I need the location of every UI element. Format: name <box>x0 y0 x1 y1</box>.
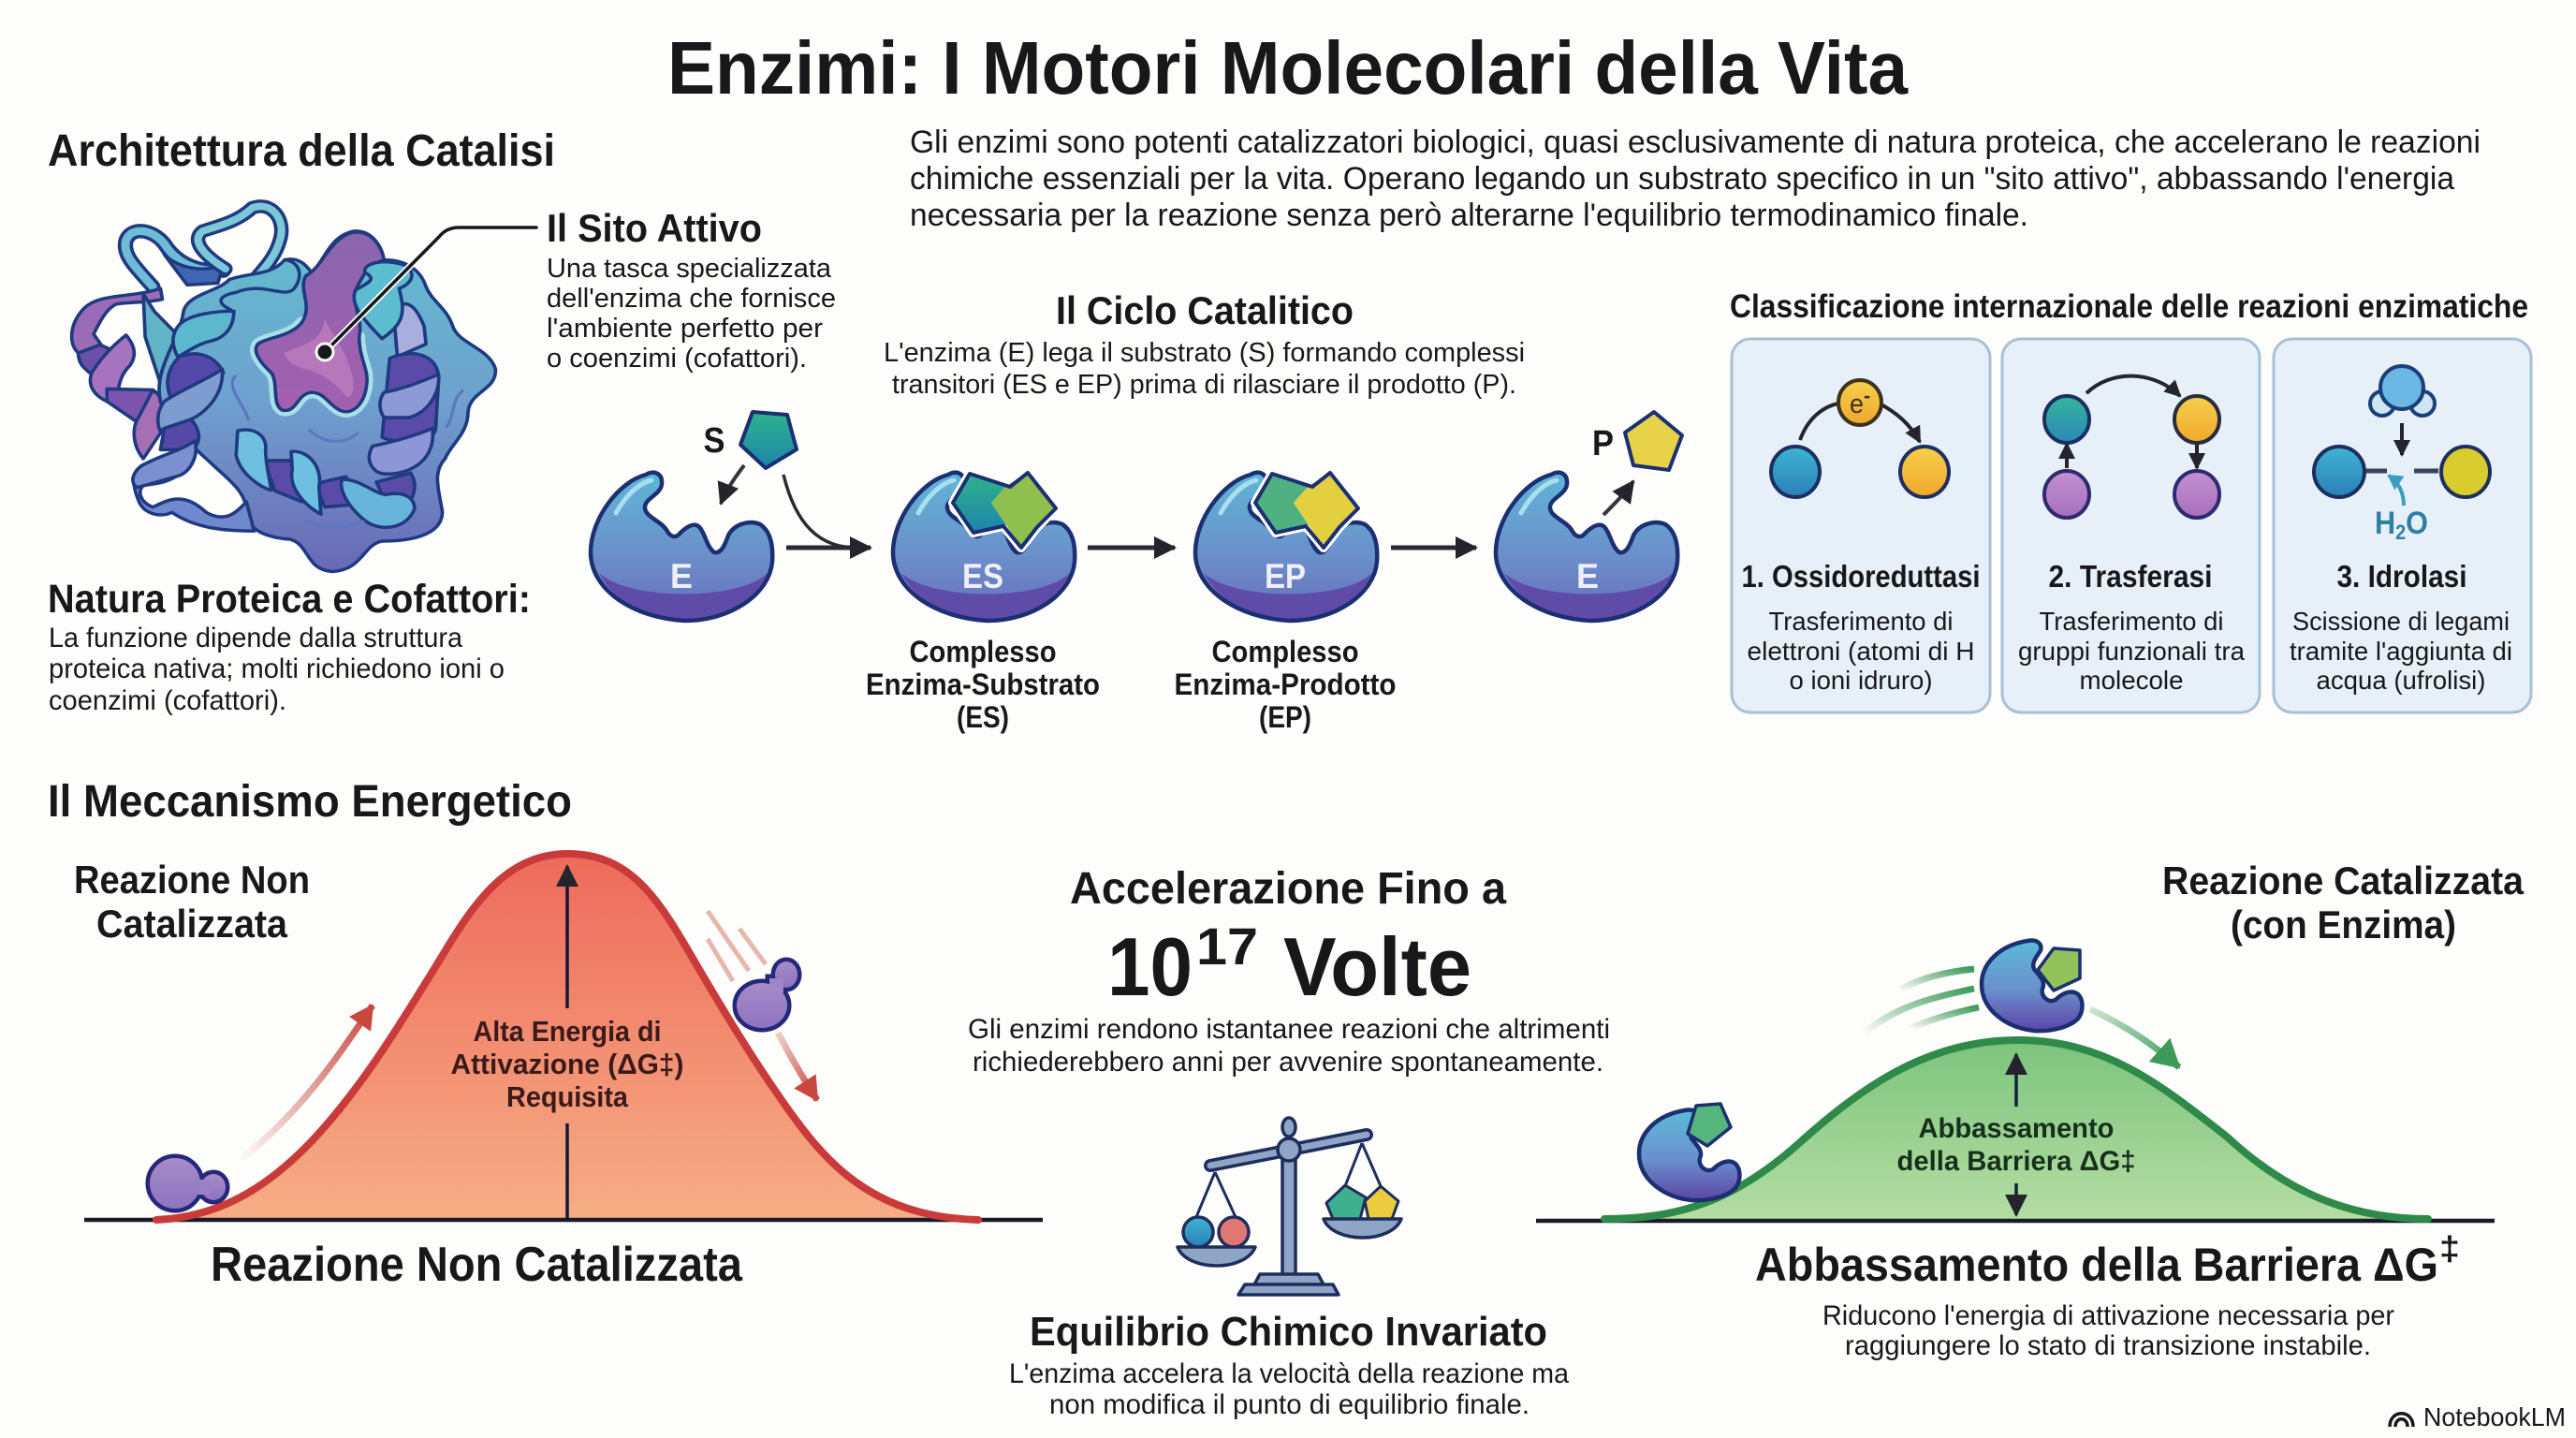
text: abbassamento description: Riducono l'energia di attivazione necessaria per <box>1822 1300 2394 1331</box>
label: reazione non catalizzata top <box>74 858 310 946</box>
card: ossidoreduttasi: - <box>1864 384 1870 407</box>
heading: abbassamento barriera: ‡ <box>2439 1229 2460 1268</box>
card: ossidoreduttasi: 1. Ossidoreduttasi <box>1741 559 1981 594</box>
icon: protein structure <box>72 206 495 572</box>
label: complesso ES: (ES) <box>957 700 1009 734</box>
text block: natura proteica: La funzione dipende dalla struttura <box>49 623 462 653</box>
text: equilibrio description <box>1009 1358 1569 1420</box>
enzyme E with product <box>1496 412 1682 621</box>
card: trasferasi <box>2002 339 2260 712</box>
enzyme E with substrate <box>591 412 797 621</box>
text: ciclo description: L'enzima (E) lega il substrato (S) formando complessi <box>884 338 1525 368</box>
label: alta energia: Attivazione (ΔG‡) <box>451 1048 683 1080</box>
intro text: necessaria per la reazione senza però alterarne l'equilibrio termodinamico finale. <box>910 198 2028 233</box>
heading: ciclo catalitico: Il Ciclo Catalitico <box>1056 288 1354 332</box>
label: complesso EP: Enzima-Prodotto <box>1174 668 1397 701</box>
heading: abbassamento barriera: Abbassamento della Barriera ΔG <box>1755 1239 2438 1291</box>
label: abbassamento inside curve: della Barriera ΔG‡ <box>1896 1146 2136 1177</box>
text: accelerazione description: richiederebbero anni per avvenire spontaneamente. <box>973 1047 1603 1078</box>
label: alta energia: Alta Energia di <box>474 1015 661 1048</box>
arrow: green downhill <box>2090 1009 2179 1067</box>
label: reazione catalizzata <box>2162 858 2525 946</box>
callout line: active site <box>316 227 536 360</box>
label: abbassamento inside curve: Abbassamento <box>1919 1113 2114 1144</box>
enzyme E with product: E <box>1576 557 1599 595</box>
arrow: EP to E <box>1391 545 1476 550</box>
card: idrolasi <box>2274 339 2531 712</box>
panel: accelerazione <box>968 864 1610 1078</box>
big number: Volte <box>1283 920 1471 1013</box>
intro text: Gli enzimi sono potenti catalizzatori biologici, quasi esclusivamente di natura proteica, che accelerano le reazioni <box>910 125 2481 160</box>
card: trasferasi: Trasferimento di <box>2039 607 2224 636</box>
label: complesso EP: (EP) <box>1259 700 1311 734</box>
card: idrolasi: H <box>2375 506 2398 541</box>
panel: classificazione <box>1730 288 2531 712</box>
card: idrolasi: Scissione di legami <box>2292 607 2510 636</box>
arrow: ES to EP <box>1088 545 1175 550</box>
label: complesso ES: Enzima-Substrato <box>866 668 1100 701</box>
card: ossidoreduttasi: Trasferimento di <box>1769 607 1953 636</box>
label: complesso EP <box>1174 635 1397 734</box>
text block: il sito attivo: dell'enzima che fornisce <box>547 284 836 314</box>
card: trasferasi: 2. Trasferasi <box>2048 559 2213 594</box>
label: reazione catalizzata: (con Enzima) <box>2231 902 2456 946</box>
arrow: uphill <box>239 1005 373 1161</box>
text block: il sito attivo: o coenzimi (cofattori). <box>547 344 807 374</box>
card: ossidoreduttasi: elettroni (atomi di H <box>1747 637 1975 666</box>
enzyme EP complex: EP <box>1265 557 1306 595</box>
text: ciclo description <box>884 338 1525 400</box>
card: idrolasi: O <box>2406 506 2428 541</box>
text: accelerazione description: Gli enzimi rendono istantanee reazioni che altrimenti <box>968 1014 1610 1045</box>
text: abbassamento description: raggiungere lo stato di transizione instabile. <box>1845 1330 2371 1361</box>
enzyme E with product: P <box>1592 424 1614 463</box>
intro text <box>910 125 2481 233</box>
big number: 10 <box>1107 920 1193 1013</box>
text block: il sito attivo: Il Sito Attivo <box>547 206 762 250</box>
card: idrolasi: 3. Idrolasi <box>2336 559 2467 594</box>
text block: il sito attivo: Una tasca specializzata <box>547 254 832 284</box>
heading: accelerazione: Accelerazione Fino a <box>1070 864 1506 914</box>
text: ciclo description: transitori (ES e EP) prima di rilasciare il prodotto (P). <box>892 370 1516 400</box>
title: Enzimi: I Motori Molecolari della Vita <box>667 26 1908 110</box>
text: equilibrio description: non modifica il punto di equilibrio finale. <box>1049 1389 1530 1420</box>
card: idrolasi: acqua (ufrolisi) <box>2316 666 2486 695</box>
heading: architettura: Architettura della Catalisi <box>48 126 555 176</box>
card: idrolasi: 2 <box>2395 521 2406 544</box>
label: reazione catalizzata: Reazione Catalizzata <box>2162 858 2525 902</box>
label: reazione non catalizzata top: Reazione Non <box>74 858 310 902</box>
text block: natura proteica: proteica nativa; molti richiedono ioni o <box>49 653 505 684</box>
speed lines <box>708 911 766 981</box>
icon: molecule start <box>150 1158 226 1209</box>
card: ossidoreduttasi: e <box>1850 389 1864 419</box>
card: trasferasi: gruppi funzionali tra <box>2018 637 2245 666</box>
label: abbassamento inside curve <box>1896 1113 2136 1177</box>
enzyme EP complex <box>1195 473 1377 621</box>
text block: il sito attivo: l'ambiente perfetto per <box>547 314 823 344</box>
intro text: chimiche essenziali per la vita. Operano legando un substrato specifico in un "sito attivo", abbassando l'energia <box>910 161 2454 197</box>
card: idrolasi: tramite l'aggiunta di <box>2290 637 2512 666</box>
enzyme ES complex <box>893 473 1075 621</box>
heading: equilibrio chimico: Equilibrio Chimico Invariato <box>1030 1309 1547 1355</box>
icon: enzyme at start <box>1639 1104 1739 1200</box>
arrow: substrate binding <box>783 475 871 548</box>
label: reazione non catalizzata top: Catalizzata <box>96 902 288 946</box>
text block: natura proteica: coenzimi (cofattori). <box>49 685 286 716</box>
text: accelerazione description <box>968 1014 1610 1078</box>
panel: reazione non catalizzata <box>74 854 1043 1292</box>
speed lines: green <box>1864 969 1979 1034</box>
panel: architettura della catalisi <box>48 126 836 716</box>
card: ossidoreduttasi <box>1732 339 1990 712</box>
heading: il meccanismo energetico: Il Meccanismo Energetico <box>48 777 572 827</box>
text: abbassamento description <box>1822 1300 2394 1361</box>
enzyme E with substrate: E <box>670 557 693 595</box>
text block: il sito attivo <box>547 206 836 374</box>
logo: NotebookLM: NotebookLM <box>2423 1402 2566 1431</box>
label: alta energia: Requisita <box>506 1080 629 1113</box>
icon: molecule descending <box>737 961 798 1028</box>
enzyme ES complex: ES <box>962 557 1003 595</box>
panel: ciclo catalitico <box>591 288 1682 734</box>
label: complesso ES: Complesso <box>910 635 1056 668</box>
label: complesso ES <box>866 635 1100 734</box>
label: alta energia <box>451 1015 683 1113</box>
text: equilibrio description: L'enzima accelera la velocità della reazione ma <box>1009 1358 1569 1389</box>
enzyme E with substrate: S <box>704 421 724 461</box>
text block: natura proteica <box>48 577 531 716</box>
arrow: downhill <box>778 1033 817 1100</box>
big number: 17 <box>1196 917 1258 976</box>
chart: red energy curve <box>84 854 1043 1220</box>
text block: natura proteica: Natura Proteica e Cofattori: <box>48 577 531 622</box>
label: reazione non catalizzata bottom: Reazione Non Catalizzata <box>211 1238 743 1292</box>
big number <box>1107 917 1471 1013</box>
panel: equilibrio chimico <box>1009 1118 1569 1420</box>
card: trasferasi: molecole <box>2080 666 2183 695</box>
icon: enzyme at top <box>1982 941 2082 1031</box>
panel: reazione catalizzata <box>1536 858 2525 1361</box>
card: ossidoreduttasi: o ioni idruro) <box>1790 666 1932 695</box>
icon: balance scale <box>1178 1118 1401 1295</box>
chart: green energy curve <box>1536 1040 2495 1221</box>
label: complesso EP: Complesso <box>1211 635 1359 668</box>
